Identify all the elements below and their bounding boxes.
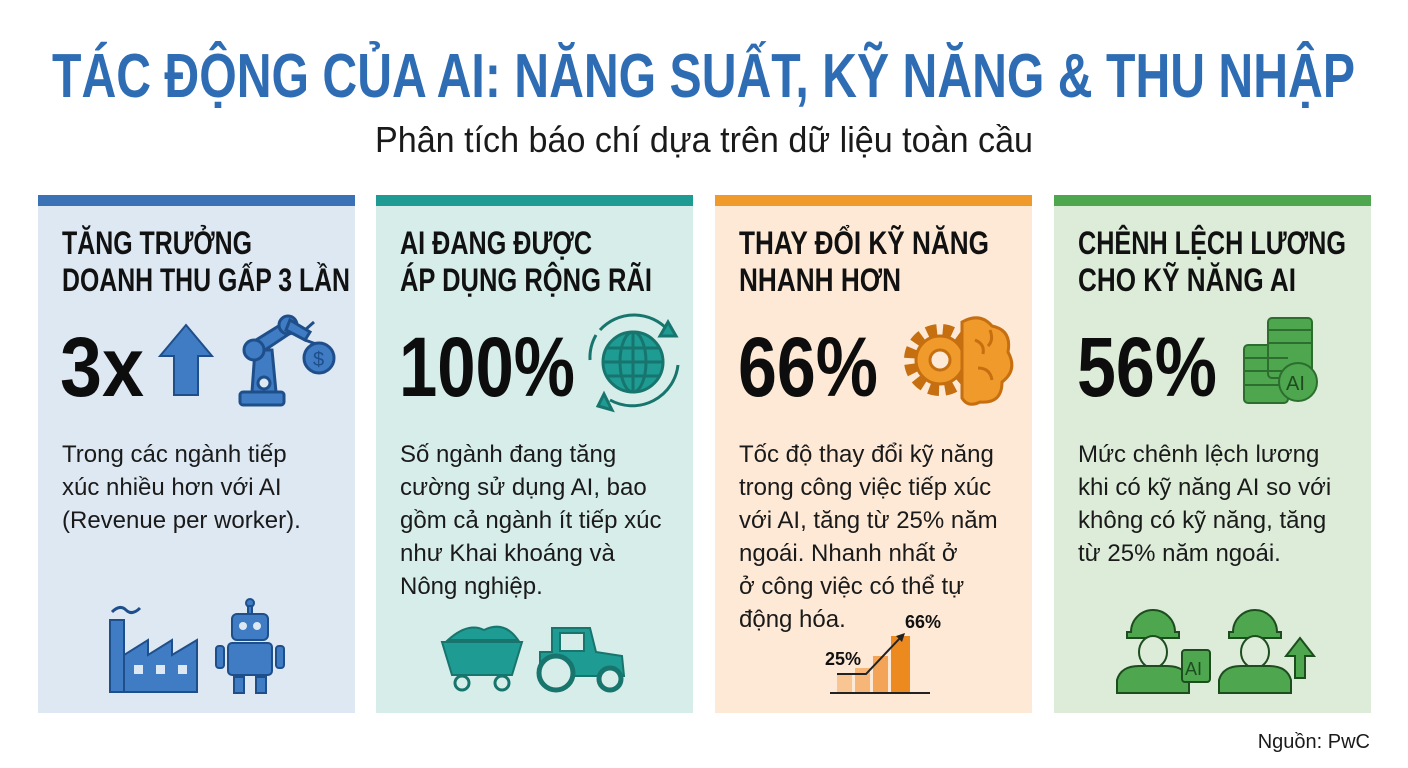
heading [739, 225, 989, 298]
body text: ở công việc có thể tự [739, 573, 964, 600]
icon: mine cart [442, 627, 522, 690]
body text: Mức chênh lệch lương [1078, 441, 1319, 468]
heading: CHO KỸ NĂNG AI [1078, 262, 1296, 298]
subtitle: Phân tích báo chí dựa trên dữ liệu toàn cầu [375, 119, 1033, 160]
icon: tractor [539, 628, 624, 690]
heading: CHÊNH LỆCH LƯƠNG [1078, 225, 1346, 261]
panel: wage premium: AI [1185, 659, 1202, 679]
icon: globe with arrows [590, 315, 678, 410]
icon: workers with AI chip [1117, 610, 1314, 693]
icon: factory [110, 607, 197, 692]
number 3x: 3x [60, 320, 144, 414]
body text: Tốc độ thay đổi kỹ năng [739, 441, 994, 468]
heading [1078, 225, 1346, 298]
body text: từ 25% năm ngoái. [1078, 540, 1281, 567]
body text: xúc nhiều hơn với AI [62, 474, 282, 501]
heading: ÁP DỤNG RỘNG RÃI [400, 262, 652, 298]
icon: coin stacks AI [1244, 318, 1317, 403]
heading: TĂNG TRƯỞNG [62, 225, 252, 261]
panel: skill change [715, 195, 1032, 713]
heading [62, 225, 350, 298]
chart: 25% to 66%: 25% [825, 649, 861, 669]
panel: wage premium: AI [1286, 373, 1305, 395]
body text: cường sử dụng AI, bao [400, 474, 647, 501]
icon: robot [216, 599, 284, 693]
body text: trong công việc tiếp xúc [739, 474, 991, 501]
body text: Số ngành đang tăng [400, 441, 616, 468]
panel: revenue growth [38, 195, 355, 713]
body text [1078, 441, 1331, 567]
body text: với AI, tăng từ 25% năm [739, 507, 998, 534]
body text: ngoái. Nhanh nhất ở [739, 540, 958, 567]
number 66%: 66% [738, 320, 878, 414]
number 56%: 56% [1077, 320, 1217, 414]
chart: 25% to 66% [825, 612, 941, 693]
body text: khi có kỹ năng AI so với [1078, 474, 1331, 501]
source: Nguồn: PwC [1258, 731, 1370, 753]
body text: Trong các ngành tiếp [62, 441, 287, 468]
icon: up arrow [160, 325, 212, 395]
body text [739, 441, 998, 633]
body text: như Khai khoáng và [400, 540, 616, 567]
icon: gear and brain [910, 318, 1012, 404]
heading: AI ĐANG ĐƯỢC [400, 225, 592, 261]
body text [62, 441, 301, 534]
heading [400, 225, 652, 298]
body text [400, 441, 662, 600]
heading: DOANH THU GẤP 3 LẦN [62, 262, 350, 298]
heading: THAY ĐỔI KỸ NĂNG [739, 225, 989, 261]
body text: gồm cả ngành ít tiếp xúc [400, 507, 662, 534]
panel: wage premium [1054, 195, 1371, 713]
body text: Nông nghiệp. [400, 573, 543, 600]
number 100%: 100% [399, 320, 575, 414]
heading: NHANH HƠN [739, 262, 901, 298]
body text: (Revenue per worker). [62, 507, 301, 534]
panel: revenue growth: $ [313, 349, 324, 371]
body text: không có kỹ năng, tăng [1078, 507, 1326, 534]
panel: AI adoption [376, 195, 693, 713]
body text: động hóa. [739, 606, 846, 633]
chart: 25% to 66%: 66% [905, 612, 941, 632]
icon: robot arm with dollar [240, 316, 334, 405]
